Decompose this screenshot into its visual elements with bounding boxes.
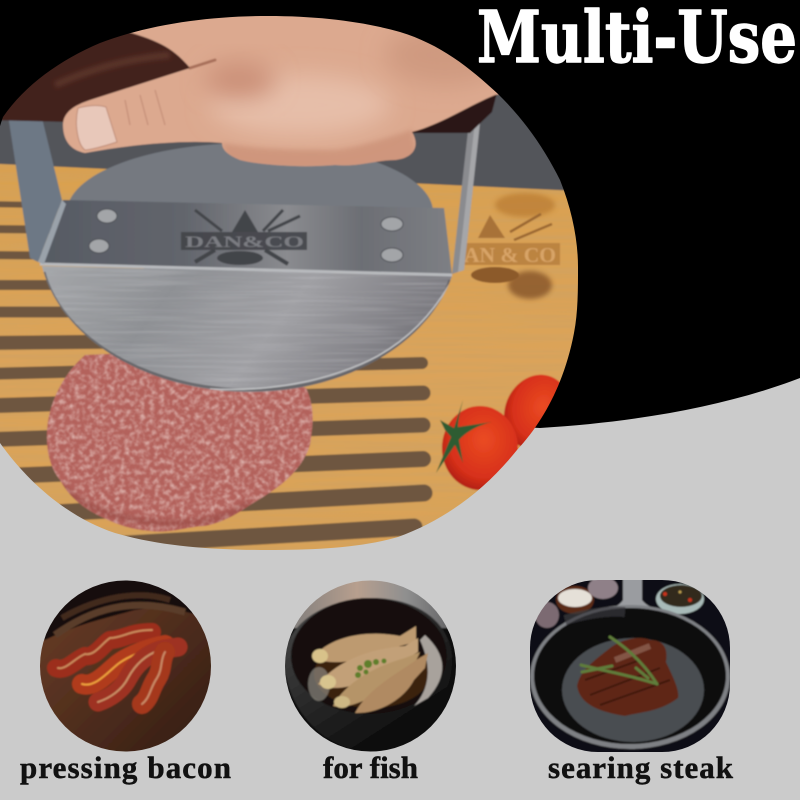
- label: pressing bacon: pressing bacon: [20, 750, 231, 785]
- rosemary: [581, 637, 657, 684]
- board logo: AN & CO: [464, 243, 556, 267]
- wood grain texture: [16, 178, 576, 550]
- label: searing steak: searing steak: [548, 750, 734, 785]
- image: steak in skillet: [528, 577, 732, 754]
- pan body: [284, 598, 452, 752]
- press logo: DAN&CO: [185, 234, 304, 251]
- main photo: burger press on a bamboo board: [0, 0, 600, 560]
- right handle post: [451, 128, 474, 274]
- garlic: [588, 577, 618, 599]
- meat patty: [46, 353, 314, 532]
- pan interior: [291, 598, 447, 714]
- image: fish in pan: [283, 578, 459, 756]
- wooden handle right: [410, 93, 497, 133]
- left handle post: [8, 115, 62, 262]
- skillet handle: [616, 580, 650, 607]
- image: pressing bacon: [38, 578, 214, 756]
- pepper bowl: [656, 584, 704, 614]
- press logo: [181, 210, 307, 265]
- bamboo board: [0, 163, 600, 560]
- rivets: [89, 209, 403, 262]
- board logo: [460, 214, 560, 283]
- label: for fish: for fish: [323, 750, 418, 785]
- board grooves: [0, 204, 424, 548]
- fish: [312, 626, 428, 713]
- tomato front: [436, 400, 518, 490]
- press front disc: [40, 260, 455, 395]
- tomato back: [503, 374, 560, 447]
- wooden handle left: [2, 33, 190, 122]
- thumbnail: [76, 106, 117, 150]
- skillet: [530, 605, 730, 749]
- steak: [577, 638, 678, 716]
- hand: [62, 16, 499, 168]
- bacon strips: [56, 630, 178, 704]
- salt bowl: [556, 586, 594, 614]
- press rear plate: [67, 143, 433, 281]
- press rear bar: [40, 200, 452, 275]
- dark counter: [0, 94, 564, 192]
